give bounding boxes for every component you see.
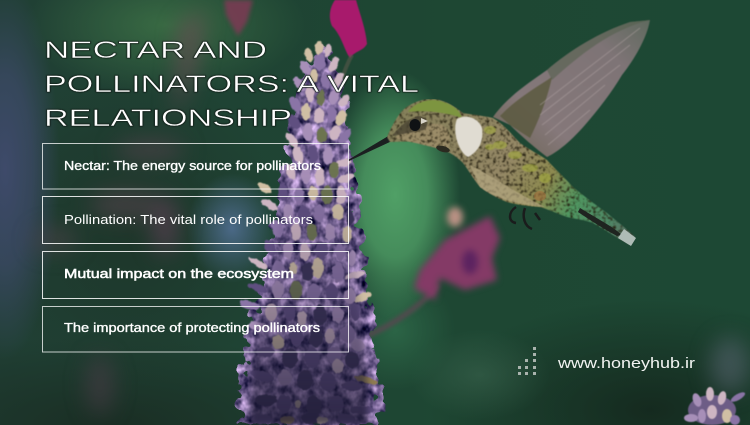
tail dark edge: [578, 208, 622, 236]
list item 4: [42, 306, 348, 352]
body: [387, 99, 635, 245]
white throat: [455, 117, 482, 157]
title: RELATIONSHIP: [44, 105, 292, 132]
flower spike: [238, 41, 380, 425]
title: [44, 37, 419, 132]
website url: www.honeyhub.ir: [557, 355, 695, 372]
list item 1: [42, 144, 348, 189]
title: POLLINATORS: A VITAL: [44, 71, 419, 98]
crown and back: [408, 100, 462, 118]
feet: [510, 207, 540, 229]
list item 2: Pollination: The vital role of pollinators: [64, 212, 314, 227]
magenta flower top: [330, 0, 367, 82]
small flower bottom right: [684, 387, 746, 425]
blurred pink flower: [362, 207, 500, 338]
breast speckles: [484, 126, 551, 183]
hummingbird: [348, 20, 650, 246]
wing: [493, 20, 650, 157]
title: NECTAR AND: [44, 37, 267, 64]
list item 2: [42, 196, 348, 244]
beak: [348, 135, 392, 161]
flower petals: [238, 41, 378, 424]
list item 1: Nectar: The energy source for pollinators: [64, 158, 322, 173]
face: [395, 124, 450, 151]
list item 3: [42, 252, 348, 298]
belly: [470, 165, 545, 207]
list item 4: The importance of protecting pollinators: [64, 320, 321, 335]
icon: dotted bars: [518, 347, 536, 375]
list item 3: Mutual impact on the ecosystem: [64, 266, 294, 281]
